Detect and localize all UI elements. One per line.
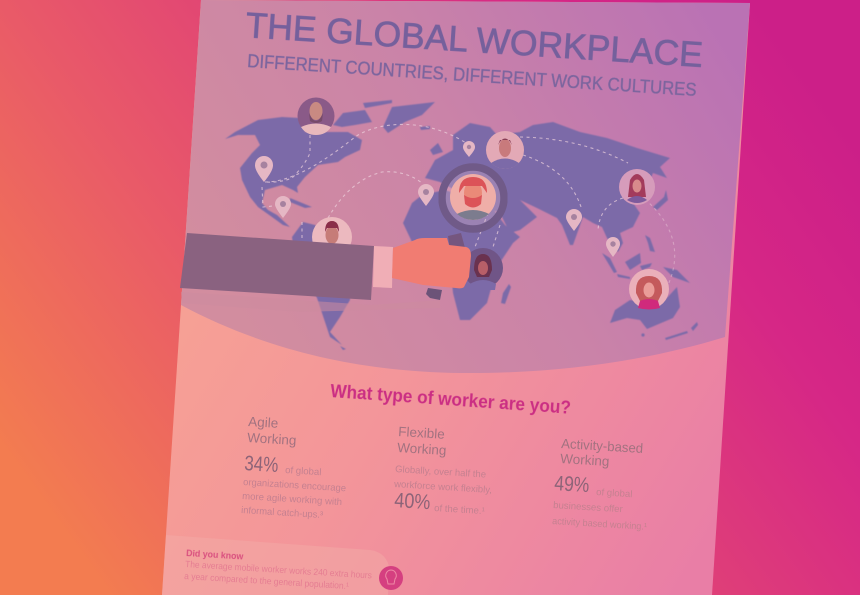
sumatra [602,253,617,273]
dark object below hand [426,288,442,300]
person: australia woman [629,269,669,310]
body text: Globally, over half the [395,464,486,481]
lens ring [442,167,504,229]
continent: greenland [383,102,435,133]
java [617,274,630,279]
icon: location pins [255,141,620,257]
map background panel [181,0,750,373]
body text: workforce work flexibly, [393,479,492,496]
philippines [645,235,655,252]
new zealand [665,331,688,340]
body text: of global [285,465,322,478]
hand [392,238,471,288]
arctic islands [333,110,372,127]
pin [418,184,434,206]
stat: 34% [244,452,279,477]
britain [430,143,443,155]
body text [241,465,346,521]
column heading: Activity-based [561,436,644,456]
callout text: The average mobile worker works 240 extra hours [185,559,373,580]
pin [255,156,273,182]
magnifying glass [442,167,504,250]
column: activity-based working [552,436,647,533]
body text [393,464,492,517]
iceland [420,126,430,130]
stat: 49% [554,472,590,497]
person: north america man [298,98,334,135]
title: THE GLOBAL WORKPLACE [244,5,704,75]
column heading [397,424,447,458]
body text: of global [596,487,633,500]
body text: organizations encourage [243,477,346,494]
person: centre man [450,174,496,220]
pin [275,196,291,218]
paper sheet [162,0,750,595]
continent: australia [610,287,680,329]
sulawesi [640,263,652,270]
column heading: Flexible [398,424,445,442]
callout heading: Did you know [186,548,244,561]
body text [552,487,647,533]
person: east asia woman [619,169,655,205]
madagascar [501,284,511,304]
column heading: Agile [248,414,279,431]
dashed connection routes [262,124,675,285]
borneo [625,253,641,270]
suit sleeve [180,233,374,300]
subtitle: DIFFERENT COUNTRIES, DIFFERENT WORK CULTURES [247,50,697,100]
shirt cuff [373,246,393,288]
continent: eurasia [425,122,670,252]
column: flexible working [393,424,492,517]
cuba [290,198,312,208]
column heading: Working [560,451,610,469]
pin [463,141,475,157]
person: russia man [486,131,524,169]
column heading: Working [397,440,447,458]
body text: informal catch-ups.³ [241,505,323,521]
did you know panel [162,535,403,595]
column heading [560,436,644,469]
body text: activity based working.¹ [552,516,647,533]
arm with hand [180,233,471,312]
stat: 40% [394,489,431,514]
pin [606,237,620,257]
tasmania [641,333,645,337]
icon: light bulb [379,566,403,590]
arctic strip [363,100,392,108]
continent: south america [292,222,350,345]
magnifier handle [448,233,465,250]
column heading: Working [247,430,297,448]
world map [225,100,698,350]
body text: more agile working with [242,491,342,508]
pin [566,209,582,231]
callout text [184,559,373,591]
continent: africa [403,190,520,320]
column: agile working [241,414,346,521]
body text: of the time.¹ [434,503,485,517]
japan [653,190,668,210]
person: africa woman [463,248,503,290]
person: south america man [312,217,352,257]
tip of south america [340,346,346,350]
arm shadow [181,292,440,312]
continent: north america [225,117,362,227]
body text: businesses offer [553,500,624,515]
column heading [247,414,297,448]
callout background [162,535,389,595]
new guinea [663,267,690,283]
callout text: a year compared to the general population.¹ [184,571,349,591]
section heading: What type of worker are you? [330,381,572,418]
